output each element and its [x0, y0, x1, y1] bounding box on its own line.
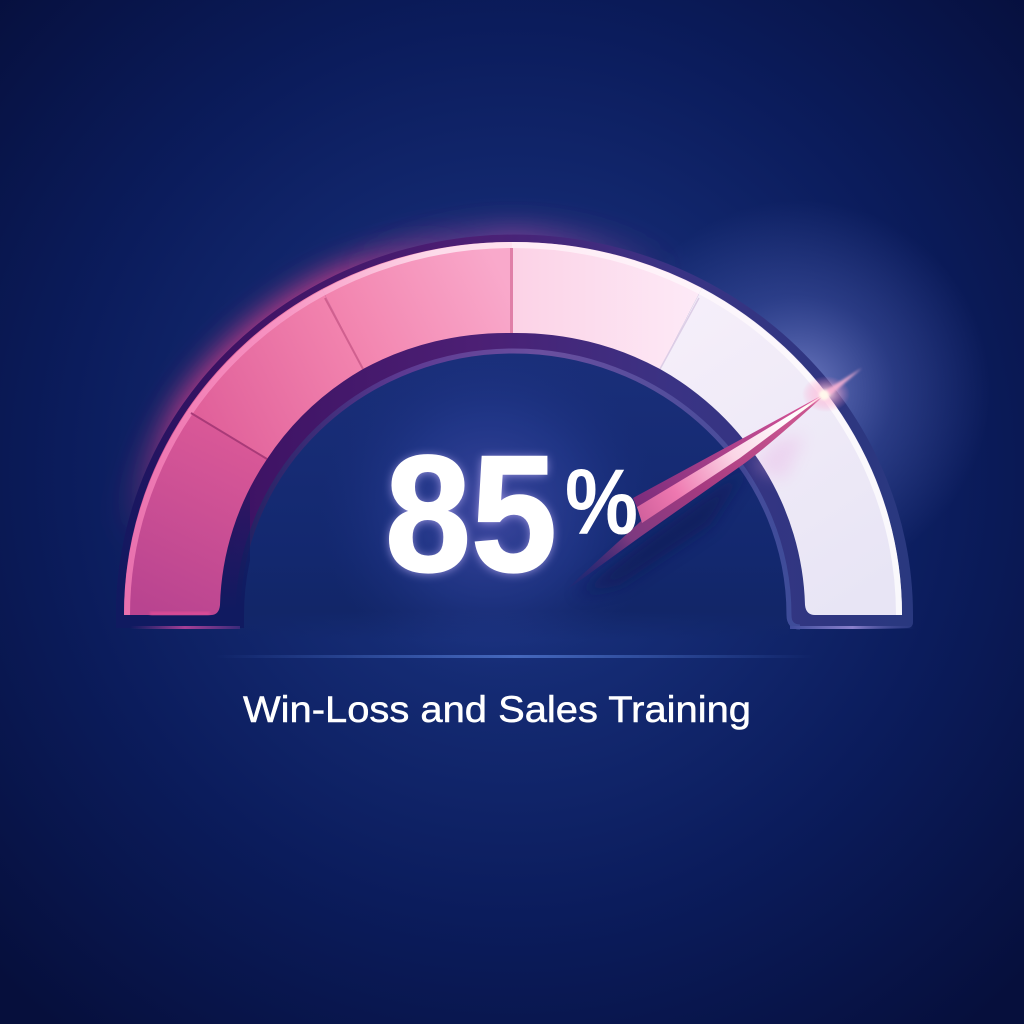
center glow behind value: [320, 340, 660, 680]
segment 2: pink: [187, 289, 363, 459]
needle: [560, 368, 862, 595]
gauge: [119, 210, 968, 630]
segment dividers: [191, 248, 699, 459]
percent sign: %: [565, 450, 638, 554]
needle tint on dial: [750, 435, 805, 480]
segment 1: dark pink: [124, 410, 267, 615]
track lower-left shade: [116, 488, 250, 628]
bright base edge left: [150, 612, 210, 615]
bottom glow right: [790, 626, 915, 629]
value number: 85: [385, 422, 557, 607]
outer glow halo: [112, 200, 990, 622]
bottom glow left: [130, 626, 240, 629]
needle shadow: [575, 465, 750, 595]
tip flare: [802, 368, 862, 412]
segment 3: light pink and upper segment 2: [322, 242, 702, 369]
needle bright core: [637, 392, 828, 523]
value: 85%: 85: [385, 423, 557, 608]
inner track line: [238, 351, 800, 627]
inner dial face: [238, 351, 789, 640]
needle lower facet: [560, 392, 828, 595]
dark gauge track: [116, 235, 913, 628]
subtitle: Win-Loss and Sales Training: [243, 689, 751, 730]
divider rule: [215, 655, 815, 658]
segment 4: pale lavender: [660, 288, 902, 615]
bright outer rim: [127, 245, 899, 615]
needle upper facet: [633, 392, 828, 510]
